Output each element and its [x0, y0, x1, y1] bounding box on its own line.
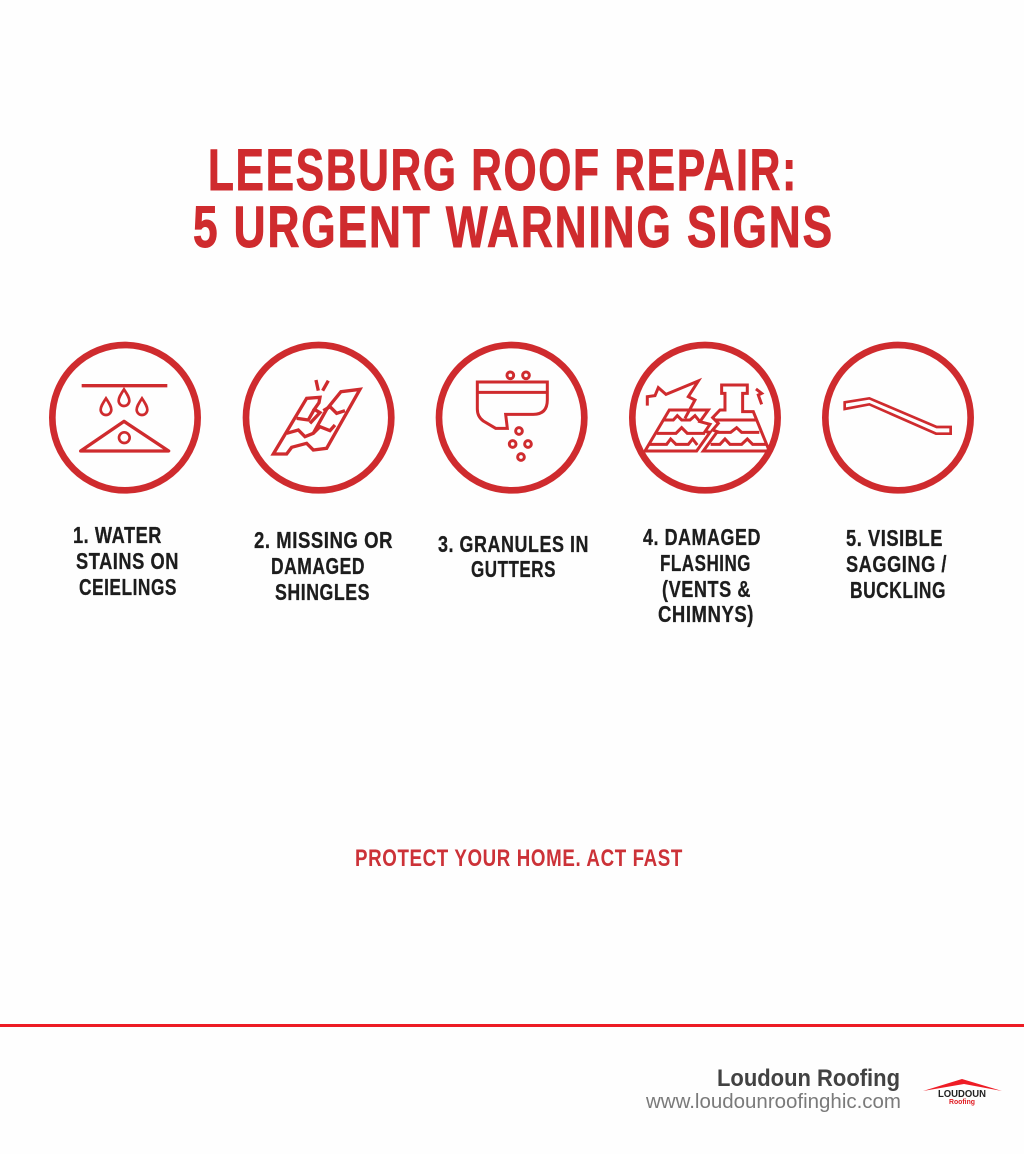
footer website: www.loudounroofinghic.com	[645, 1091, 901, 1113]
label: sign 1: STAINS ON	[76, 548, 179, 574]
footer brand name: Loudoun Roofing	[717, 1065, 900, 1092]
label: sign 3: 3. GRANULES IN	[438, 531, 589, 557]
label: sign 2: DAMAGED	[271, 553, 365, 579]
label: sign 4: CHIMNYS)	[658, 601, 754, 627]
label: sign 1	[73, 522, 179, 600]
label: sign 2: SHINGLES	[275, 579, 370, 605]
label: sign 4: FLASHING	[660, 550, 751, 576]
icon: water stains on ceiling	[52, 345, 198, 490]
label: sign 5: SAGGING /	[846, 551, 947, 577]
label: sign 4	[643, 524, 761, 627]
icon: granules in gutters	[439, 345, 584, 490]
title: 5 URGENT WARNING SIGNS	[193, 195, 834, 260]
label: sign 5: 5. VISIBLE	[846, 525, 943, 551]
label: sign 2: 2. MISSING OR	[254, 527, 393, 553]
title	[193, 138, 834, 260]
logo: Roofing	[949, 1097, 975, 1106]
title: LEESBURG ROOF REPAIR:	[208, 138, 798, 203]
icon: missing or damaged shingles	[246, 345, 391, 490]
icon: damaged flashing at vents and chimneys	[632, 345, 778, 490]
label: sign 3	[438, 531, 589, 582]
label: sign 5: BUCKLING	[850, 577, 946, 603]
logo: LOUDOUN	[938, 1088, 986, 1100]
label: sign 1: CEIELINGS	[79, 574, 177, 600]
tagline: PROTECT YOUR HOME. ACT FAST	[355, 845, 683, 872]
label: sign 5	[846, 525, 947, 603]
label: sign 1: 1. WATER	[73, 522, 162, 548]
label: sign 4: 4. DAMAGED	[643, 524, 761, 550]
icon: visible sagging or buckling	[825, 345, 971, 490]
label: sign 2	[254, 527, 393, 605]
label: sign 3: GUTTERS	[471, 556, 556, 582]
logo	[923, 1079, 1002, 1106]
label: sign 4: (VENTS &	[662, 576, 751, 602]
